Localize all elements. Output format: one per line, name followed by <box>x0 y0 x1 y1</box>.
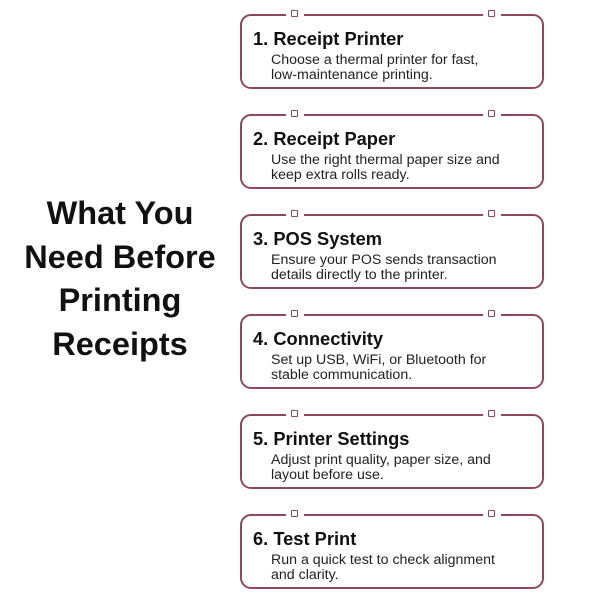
title <box>24 195 216 362</box>
card 3: details directly to the printer. <box>271 267 448 283</box>
card 2: Use the right thermal paper size and <box>271 152 500 168</box>
card 2 <box>240 114 544 189</box>
card 6: Run a quick test to check alignment <box>271 552 495 568</box>
card 6: 6. Test Print <box>253 528 356 549</box>
card 5 <box>240 414 544 489</box>
card 1 <box>240 14 544 89</box>
card 2: 2. Receipt Paper <box>253 128 395 149</box>
card 1: Choose a thermal printer for fast, <box>271 52 478 68</box>
card 6: and clarity. <box>271 567 339 583</box>
card 4: stable communication. <box>271 367 412 383</box>
card 1: 1. Receipt Printer <box>253 28 403 49</box>
card 5: Adjust print quality, paper size, and <box>271 452 491 468</box>
card 6 <box>240 514 544 589</box>
title: Printing <box>59 282 181 318</box>
card 1: low-maintenance printing. <box>271 67 433 83</box>
card 3: Ensure your POS sends transaction <box>271 252 497 268</box>
title: Receipts <box>52 326 188 362</box>
card 5: layout before use. <box>271 467 384 483</box>
card 4 <box>240 314 544 389</box>
card 3: 3. POS System <box>253 228 382 249</box>
card 4: 4. Connectivity <box>253 328 383 349</box>
card 2: keep extra rolls ready. <box>271 167 410 183</box>
card 3 <box>240 214 544 289</box>
card 4: Set up USB, WiFi, or Bluetooth for <box>271 352 486 368</box>
card 5: 5. Printer Settings <box>253 428 409 449</box>
title: Need Before <box>24 238 216 274</box>
title: What You <box>47 195 193 231</box>
